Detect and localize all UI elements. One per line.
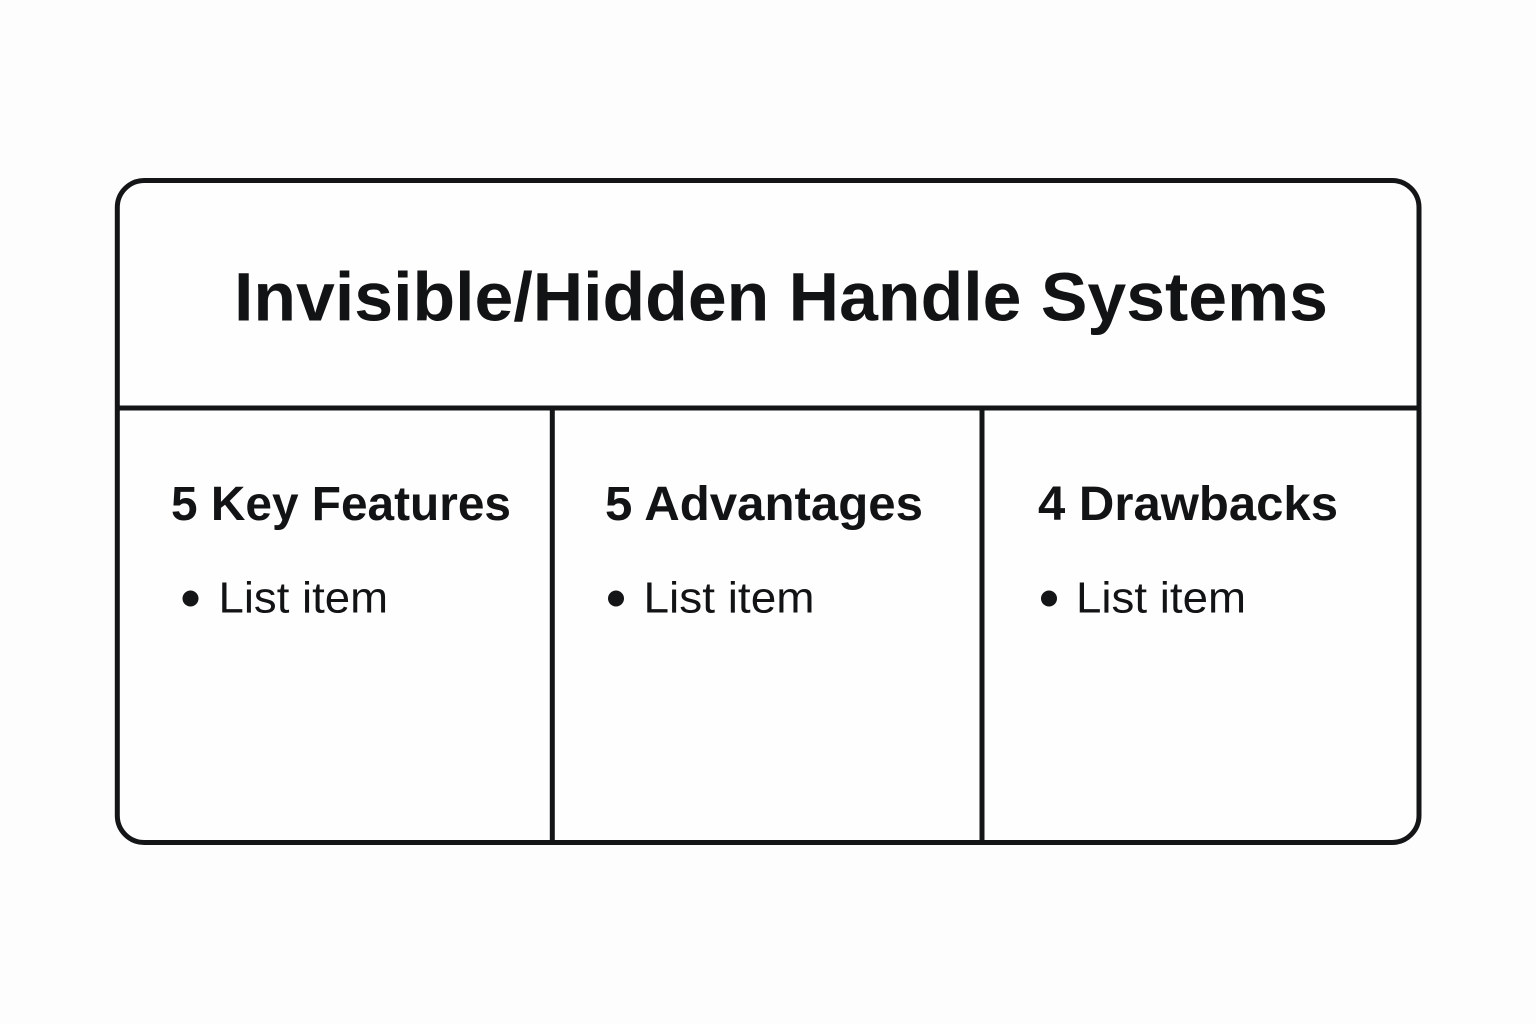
icon: bullet	[608, 590, 624, 606]
heading: 4 Drawbacks: 4 Drawbacks	[1038, 478, 1338, 531]
title: Invisible/Hidden Handle Systems	[234, 258, 1328, 336]
panel: table frame	[117, 180, 1419, 842]
icon: bullet	[1041, 590, 1057, 606]
panel: drawbacks column	[1038, 478, 1338, 622]
heading: 5 Advantages: 5 Advantages	[605, 478, 923, 531]
list item: List item	[1076, 574, 1246, 622]
list item: List item	[218, 574, 388, 622]
panel: advantages column	[605, 478, 923, 622]
heading: 5 Key Features: 5 Key Features	[171, 478, 511, 531]
icon: bullet	[182, 590, 198, 606]
list item: List item	[644, 574, 814, 622]
panel: key features column	[171, 478, 511, 622]
